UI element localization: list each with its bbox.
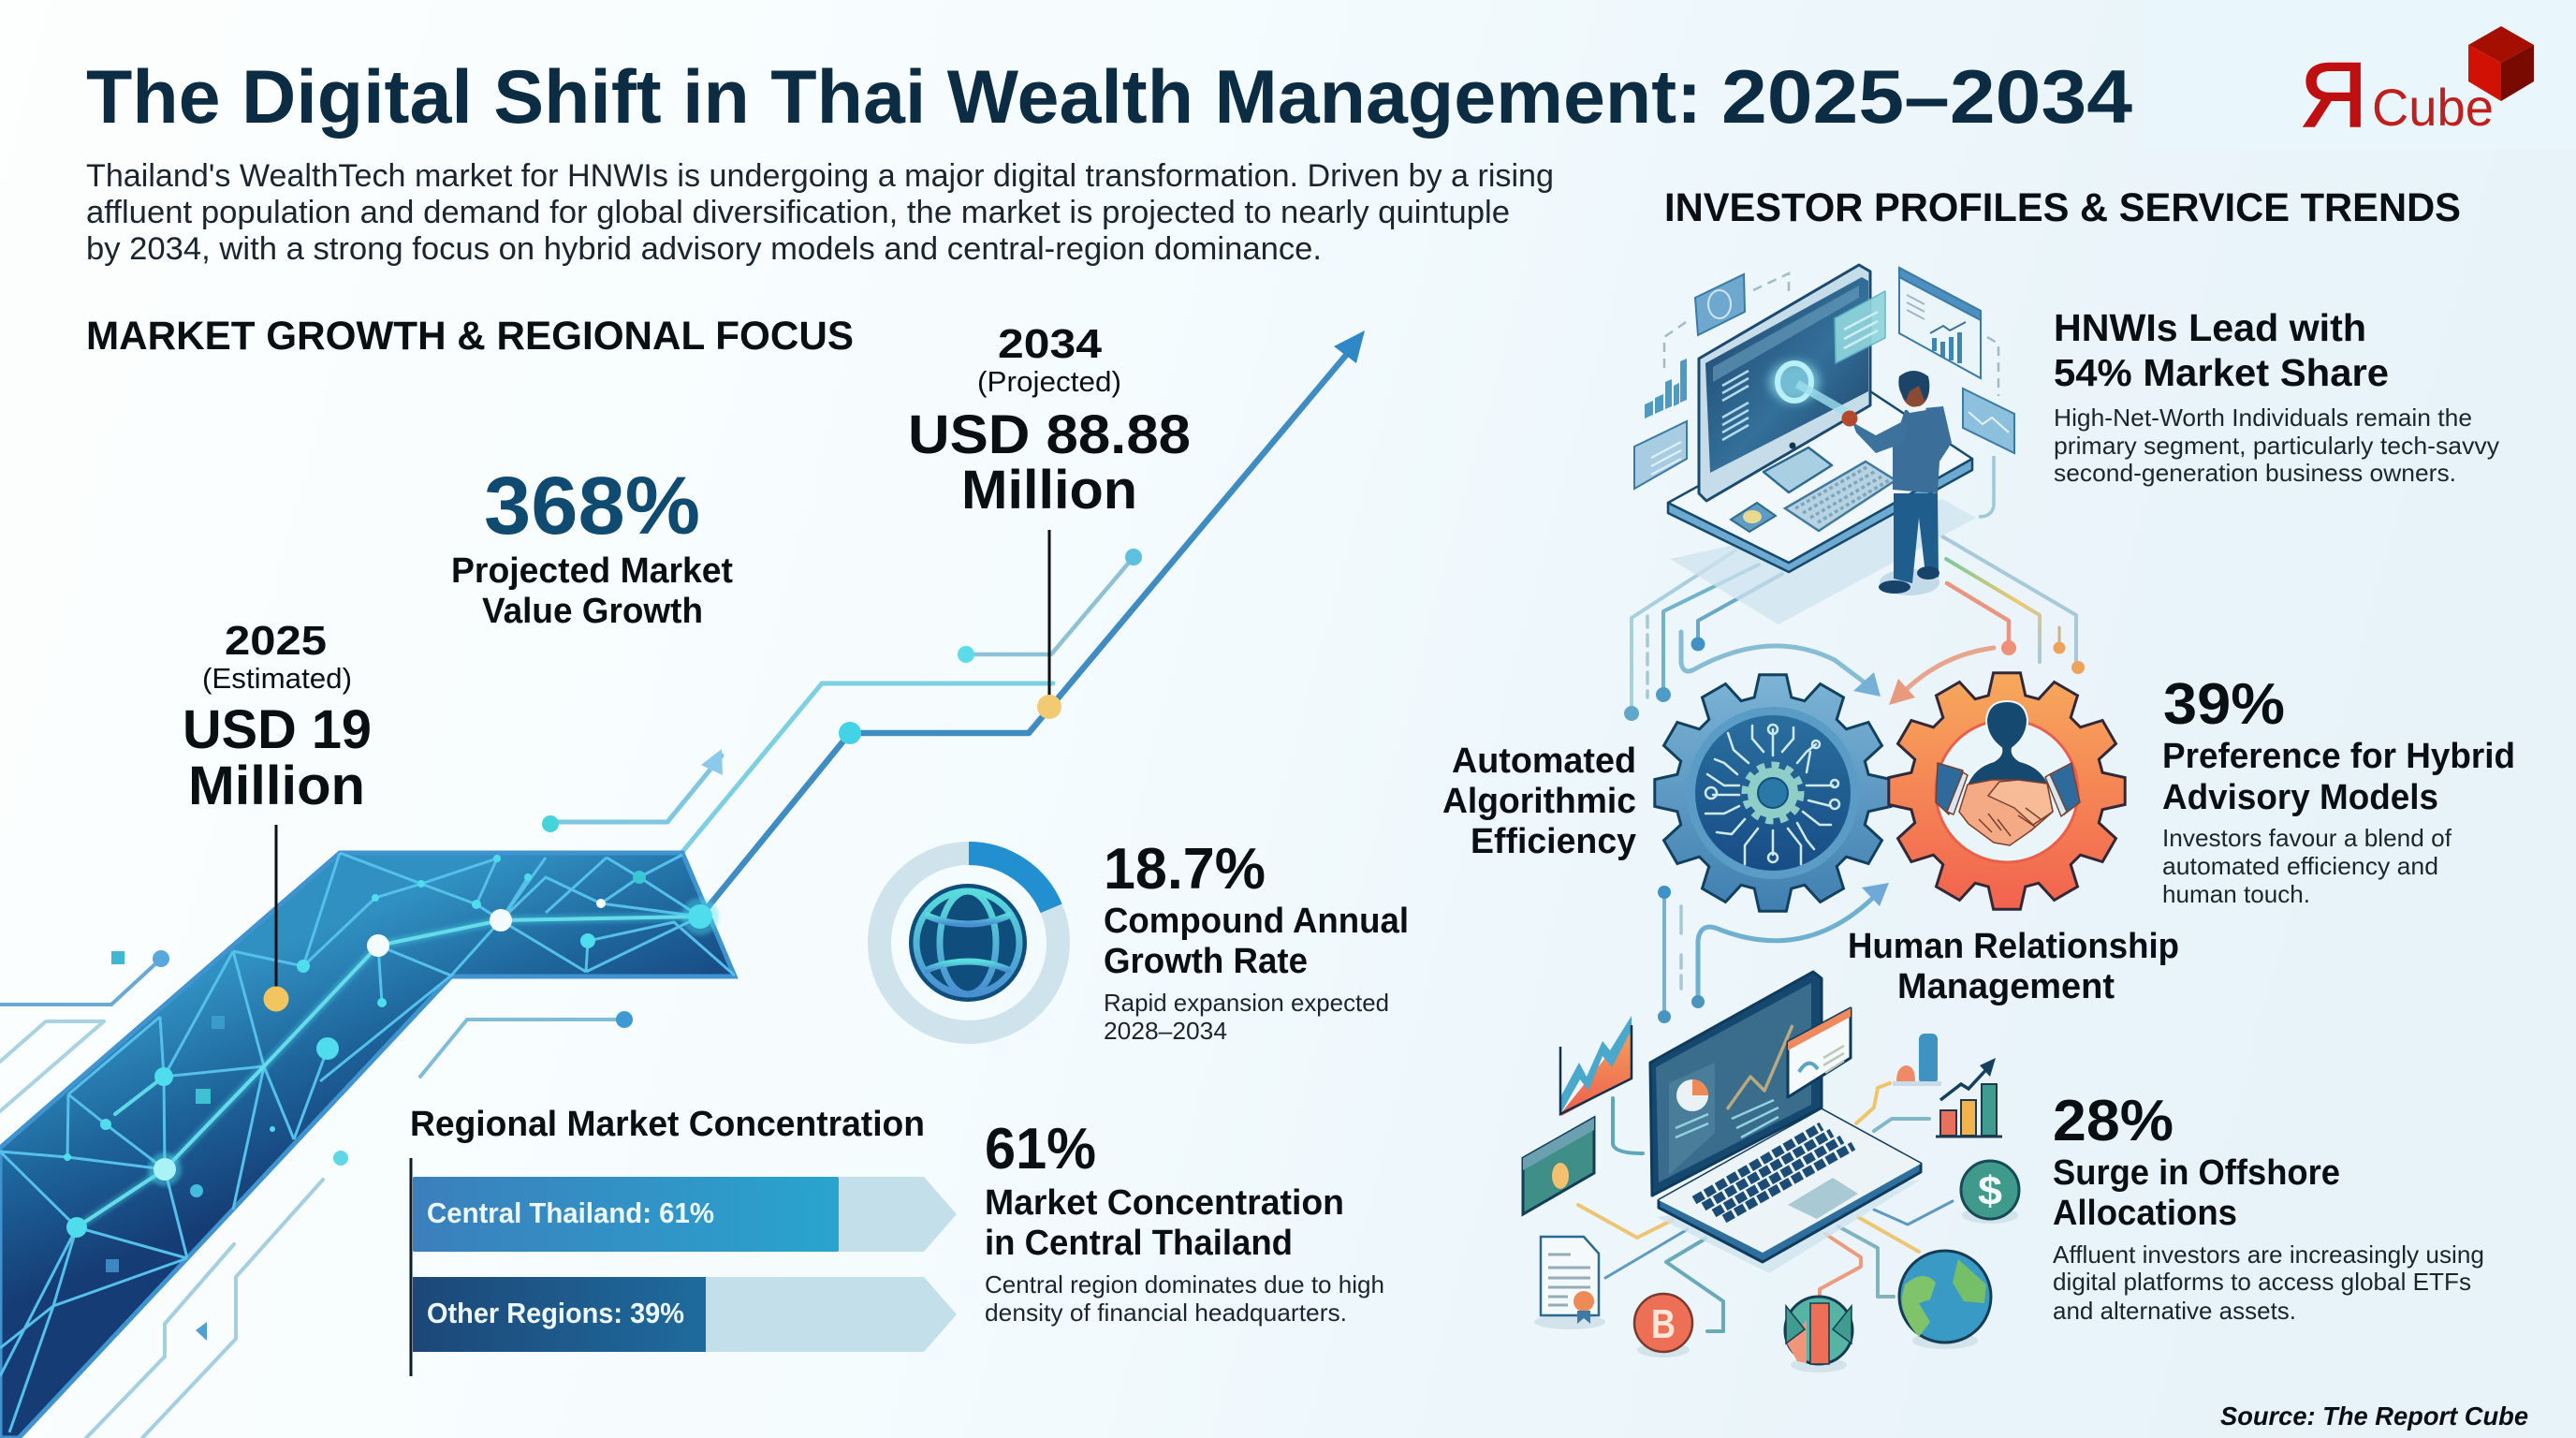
- gear label: human: [1848, 927, 2179, 1006]
- asset link lines: [1578, 1083, 1953, 1331]
- icon: world globe: [1899, 1251, 1991, 1349]
- callout: 2025 estimate: USD 19: [183, 699, 372, 760]
- stat: hybrid advisory preference: automated efficiency and: [2162, 852, 2438, 880]
- track: other regions: [413, 1277, 957, 1352]
- logo wordmark: Cube: [2372, 78, 2494, 137]
- gear label: automated: Efficiency: [1471, 822, 1636, 861]
- gear label: human: Human Relationship: [1848, 927, 2179, 966]
- icon: certificate document: [1534, 1237, 1605, 1329]
- stat: HNWIs market share: 54% Market Share: [2054, 351, 2389, 394]
- section heading: market growth: MARKET GROWTH & REGIONAL FOCUS: [86, 314, 854, 359]
- illustration: investor at workstation: [1634, 265, 2014, 624]
- icon: dollar coin: $: [1978, 1168, 2002, 1214]
- callout: 2025 estimate: (Estimated): [202, 662, 352, 695]
- intro paragraph: by 2034, with a strong focus on hybrid advisory models and central-region dominance.: [86, 231, 1322, 267]
- stat: HNWIs market share: second-generation business owners.: [2054, 459, 2456, 487]
- circuit traces: [0, 549, 1142, 1438]
- stat: CAGR: Compound Annual: [1104, 902, 1409, 941]
- floating bar chart: [1645, 359, 1687, 418]
- logo: [2300, 26, 2534, 146]
- stat: 61% concentration: in Central Thailand: [985, 1224, 1293, 1263]
- dashed links: [1664, 273, 1998, 396]
- keyboard: [1785, 462, 1895, 531]
- illustration: twin gears: [1655, 673, 2125, 911]
- stat: offshore allocations: digital platforms to access global ETFs: [2053, 1268, 2471, 1296]
- connector lines between illustrations: [1624, 536, 2085, 1023]
- callout: 2034 projection: USD 88.88: [908, 404, 1191, 465]
- logo backdrop: [2144, 0, 2576, 150]
- icon: dollar coin: [1961, 1161, 2019, 1224]
- gear label: automated: [1442, 741, 1636, 861]
- circuit traces: [1705, 725, 1839, 864]
- logo wordmark: Я: [2300, 44, 2367, 146]
- bar: other regions: Other Regions: 39%: [427, 1297, 684, 1329]
- stat: 61% concentration: Market Concentration: [985, 1183, 1344, 1223]
- mesh squares: [106, 1016, 225, 1272]
- stat: offshore allocations: 28%: [2053, 1089, 2174, 1153]
- stat: 61% concentration: density of financial headquarters.: [985, 1299, 1347, 1327]
- link to panel: [1979, 456, 1994, 517]
- illustration: laptop and assets: [1523, 972, 2019, 1372]
- laptop shadow: [1657, 1180, 1921, 1273]
- digital band: [0, 853, 735, 1438]
- icon: trend chart: [1560, 1016, 1632, 1116]
- gear label: automated: Algorithmic: [1442, 782, 1636, 821]
- icon: bitcoin coin: B: [1651, 1301, 1676, 1347]
- intro paragraph: Thailand's WealthTech market for HNWIs is undergoing a major digital transformation. Driven by a rising: [86, 158, 1554, 194]
- marker: 2034: [1037, 530, 1061, 719]
- stat: HNWIs market share: HNWIs Lead with: [2054, 306, 2366, 349]
- section heading: investor profiles: INVESTOR PROFILES & SERVICE TRENDS: [1664, 185, 2461, 230]
- track: central thailand: [413, 1177, 957, 1252]
- stat: CAGR: [1104, 837, 1409, 1045]
- stat: 61% concentration: 61%: [985, 1117, 1096, 1181]
- callout: 368% growth: [451, 461, 733, 631]
- stat: offshore allocations: Affluent investors are increasingly using: [2053, 1240, 2484, 1269]
- gear label: human: Management: [1897, 967, 2115, 1006]
- callout: 368% growth: Projected Market: [451, 551, 733, 591]
- floating data panels: [1634, 268, 2014, 489]
- callout: 2034 projection: Million: [961, 460, 1137, 521]
- stat: CAGR: Growth Rate: [1104, 942, 1308, 981]
- desk: [1668, 391, 1972, 572]
- stat: hybrid advisory preference: Investors favour a blend of: [2162, 824, 2452, 852]
- stat: HNWIs market share: High-Net-Worth Individuals remain the: [2054, 404, 2472, 432]
- icon: allocation pie: [1785, 1297, 1852, 1372]
- stat: offshore allocations: Surge in Offshore: [2053, 1153, 2340, 1193]
- chart heading: Regional Market Concentration: [410, 1105, 925, 1144]
- title: The Digital Shift in Thai Wealth Management:: [86, 55, 1702, 139]
- stat: hybrid advisory preference: Preference for Hybrid: [2162, 737, 2515, 776]
- stat: HNWIs market share: primary segment, particularly tech-savvy: [2054, 432, 2499, 460]
- callout: 2034 projection: (Projected): [977, 365, 1121, 398]
- regional bar chart: [410, 1105, 957, 1376]
- callout: 2025 estimate: [183, 618, 372, 816]
- donut highlight: 18.7%: [969, 854, 1051, 908]
- panel chart details: [1651, 290, 2009, 475]
- growth chart: [0, 330, 1365, 1438]
- gear: human relationship: [1889, 673, 2125, 909]
- CAGR donut and globe icon: [880, 854, 1058, 1032]
- popup card: [1788, 1008, 1851, 1097]
- callout: 2034 projection: 2034: [998, 321, 1103, 367]
- stat: 61% concentration: [985, 1117, 1384, 1327]
- callout: 368% growth: Value Growth: [482, 592, 703, 631]
- icon: globe: [909, 884, 1027, 1002]
- callout: 2025 estimate: 2025: [225, 618, 327, 664]
- logo mark: cube: [2468, 26, 2534, 101]
- handshake: [1936, 763, 2080, 845]
- callout: 2034 projection: [908, 321, 1191, 521]
- investor figure: [1842, 371, 1952, 595]
- person silhouette: [1966, 701, 2050, 800]
- desk shadow: [1670, 499, 1976, 624]
- stat: CAGR: 2028–2034: [1104, 1017, 1227, 1045]
- stat: offshore allocations: and alternative assets.: [2053, 1297, 2296, 1325]
- stat: 61% concentration: Central region dominates due to high: [985, 1270, 1384, 1299]
- laptop: [1650, 972, 1921, 1262]
- desk gadget: [1731, 503, 1776, 532]
- stat: CAGR: Rapid expansion expected: [1104, 989, 1389, 1017]
- mesh lines: [0, 853, 735, 1432]
- glowing data line: [77, 917, 700, 1227]
- stat: hybrid advisory preference: Advisory Models: [2162, 778, 2438, 817]
- intro paragraph: affluent population and demand for global diversification, the market is projected to nearly quintuple: [86, 195, 1510, 230]
- intro paragraph: [86, 158, 1554, 267]
- mesh nodes: [64, 855, 719, 1238]
- bar: central thailand: [413, 1177, 839, 1252]
- stat: offshore allocations: [2053, 1089, 2484, 1325]
- icon: finance window: [1523, 1118, 1594, 1214]
- main growth arrow: [700, 330, 1365, 917]
- bar: other regions: [413, 1277, 706, 1352]
- callout: 368% growth: 368%: [484, 461, 700, 551]
- title: 2025–2034: [1721, 55, 2132, 139]
- stat: hybrid advisory preference: 39%: [2163, 672, 2285, 737]
- chart axis: [410, 1158, 412, 1376]
- monitor: [1699, 265, 1885, 501]
- hub gear: [1746, 766, 1800, 820]
- icon: bitcoin coin: [1634, 1294, 1692, 1357]
- stat: offshore allocations: Allocations: [2053, 1194, 2237, 1233]
- logo wordmark: [2300, 44, 2494, 146]
- icon: bar and trend: [1893, 1034, 2002, 1137]
- stat: HNWIs market share: [2054, 306, 2499, 487]
- stat: CAGR: 18.7%: [1104, 837, 1266, 902]
- source note: Source: The Report Cube: [2220, 1401, 2528, 1431]
- gear label: automated: Automated: [1452, 741, 1636, 781]
- marker: 2025: [264, 825, 288, 1011]
- donut ring: [880, 854, 1058, 1032]
- stat: hybrid advisory preference: human touch.: [2162, 880, 2310, 908]
- bar: central thailand: Central Thailand: 61%: [427, 1196, 714, 1229]
- gear: automated efficiency: [1655, 675, 1891, 911]
- callout: 2025 estimate: Million: [188, 756, 365, 816]
- stat: hybrid advisory preference: [2162, 672, 2515, 908]
